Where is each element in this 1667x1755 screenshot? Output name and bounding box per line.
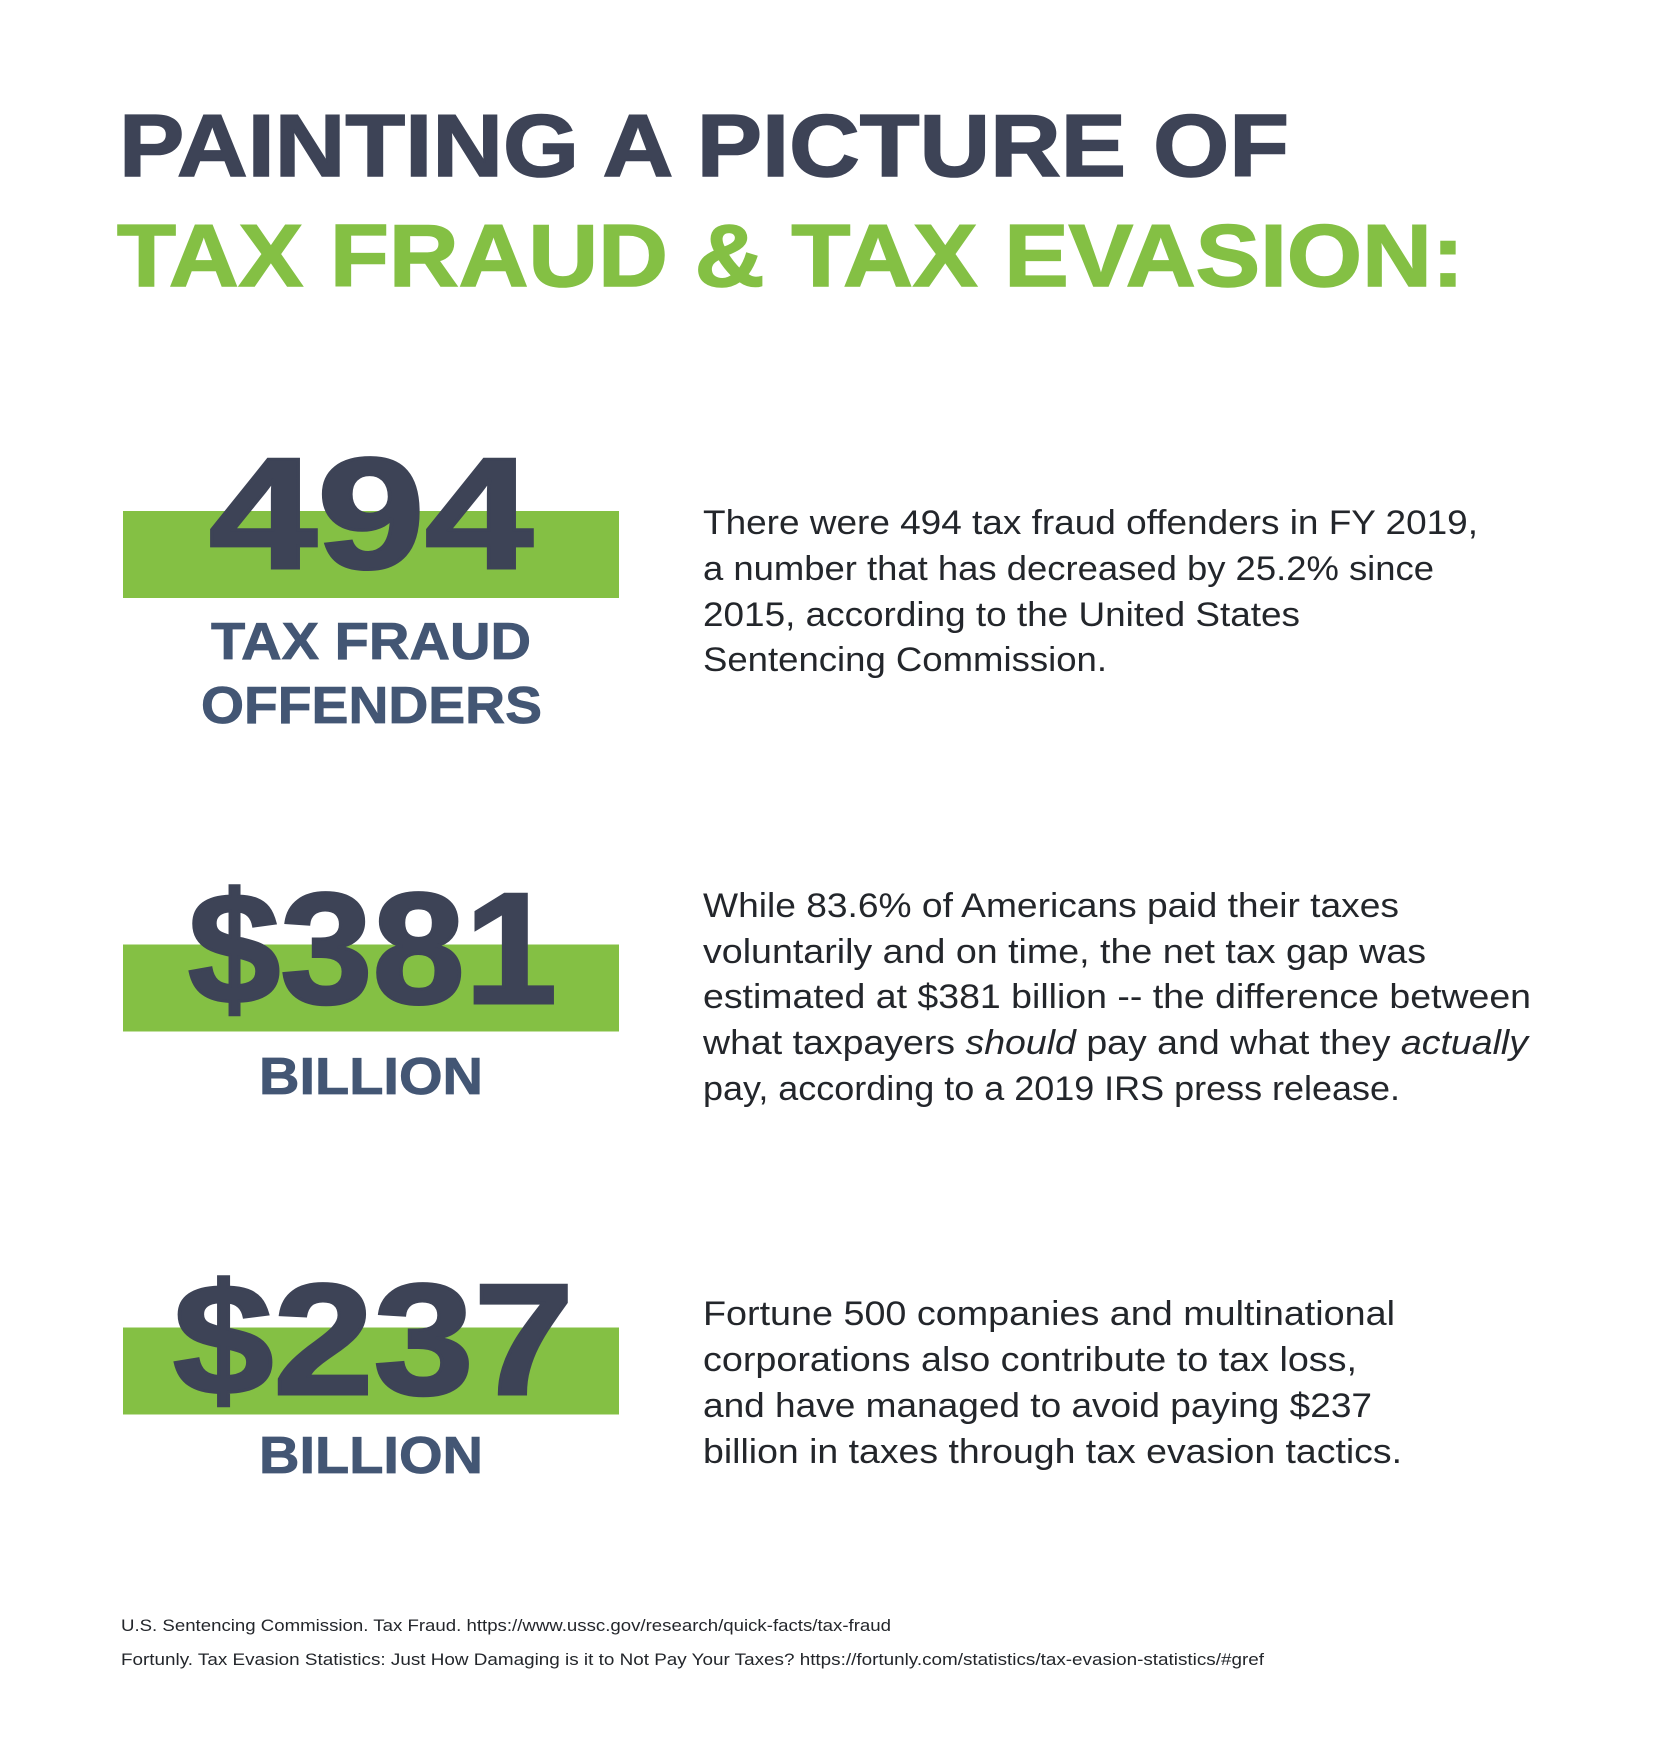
green highlight bar [123, 1328, 619, 1414]
big number $381: $381 [188, 861, 557, 1037]
label: billion: BILLION [259, 1427, 483, 1485]
description text: and have managed to avoid paying $237 [703, 1387, 1372, 1425]
label: tax fraud offenders [201, 613, 542, 735]
description text: a number that has decreased by 25.2% since [703, 550, 1434, 588]
green highlight bar [123, 944, 619, 1032]
source 2: Fortunly. Tax Evasion Statistics: Just How Damaging is it to Not Pay Your Taxes? https://fortunly.com/statistics/tax-evasion-statistics/#gref [121, 1651, 1264, 1669]
sources [121, 1617, 1264, 1669]
description text: corporations also contribute to tax loss, [703, 1341, 1357, 1379]
description text: estimated at $381 billion -- the difference between [703, 978, 1531, 1016]
title line 2: TAX FRAUD & TAX EVASION: [117, 206, 1464, 305]
label: billion: BILLION [259, 1048, 483, 1106]
big number $237: $237 [173, 1252, 574, 1428]
description text [703, 1295, 1402, 1471]
title [117, 96, 1464, 305]
description text: Sentencing Commission. [703, 641, 1107, 679]
big number 494: 494 [209, 426, 533, 602]
green highlight bar [123, 511, 619, 598]
description text: Fortune 500 companies and multinational [703, 1295, 1395, 1333]
description text: pay, according to a 2019 IRS press release. [703, 1070, 1400, 1108]
panel: $237 billion [123, 1252, 1402, 1485]
description text: There were 494 tax fraud offenders in FY 2019, [703, 504, 1478, 542]
description text: 2015, according to the United States [703, 596, 1300, 634]
panel: $381 billion [123, 861, 1531, 1108]
description text: While 83.6% of Americans paid their taxes [703, 887, 1399, 925]
description text: billion in taxes through tax evasion tactics. [703, 1433, 1402, 1471]
description text [702, 887, 1531, 1108]
description text: voluntarily and on time, the net tax gap was [703, 933, 1426, 971]
label: tax fraud offenders: OFFENDERS [201, 677, 542, 735]
panel: 494 tax fraud offenders [123, 426, 1478, 735]
description text: what taxpayers should pay and what they actually [702, 1024, 1530, 1062]
label: tax fraud offenders: TAX FRAUD [211, 613, 531, 671]
title line 1: PAINTING A PICTURE OF [119, 96, 1289, 195]
description text [703, 504, 1478, 679]
source 1: U.S. Sentencing Commission. Tax Fraud. https://www.ussc.gov/research/quick-facts/tax-fraud [121, 1617, 891, 1635]
